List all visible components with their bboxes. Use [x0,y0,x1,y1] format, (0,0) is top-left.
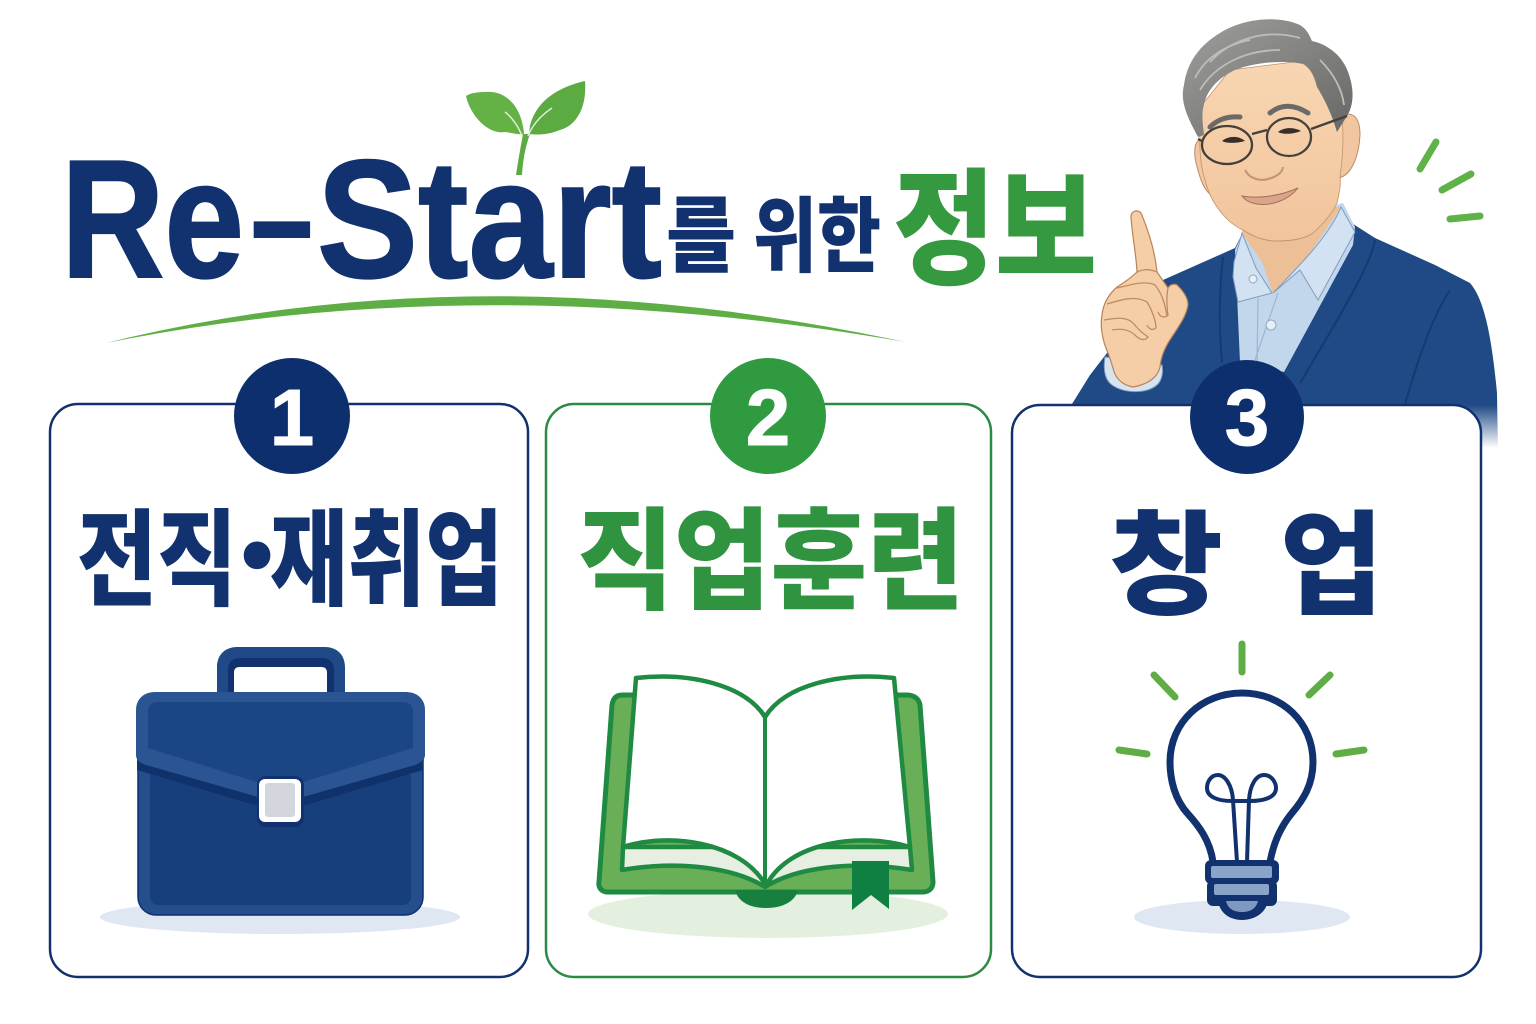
glasses [1198,116,1347,164]
mouth [1242,188,1298,204]
heading 업: 업 [1280,474,1383,638]
neck [1242,205,1341,293]
title: 를: 를 [666,170,736,289]
title: Re: Re [61,125,244,313]
hair [1183,19,1353,137]
panel: 창업 [1012,360,1481,977]
shirt [1235,203,1355,372]
number badge 3 [1190,360,1304,474]
title [61,81,1097,343]
eyes [1222,128,1301,143]
title: hyphen: - [245,139,319,296]
icon: briefcase [100,647,460,934]
title: Start: Start [317,125,662,313]
icon: sprout [466,81,585,175]
eyebrows [1210,106,1308,127]
shirt cuff [1104,357,1163,392]
nose [1245,167,1283,180]
heading [77,458,503,639]
panel: 전직·재취업 [50,358,528,977]
cardigan bands [1220,240,1450,404]
ear left [1195,140,1214,196]
finger creases [1104,270,1168,340]
icon: light bulb [1119,644,1364,934]
panel border [50,404,528,977]
heading part: 재취업: 재취업 [270,476,503,628]
character: presenter [1072,19,1498,450]
ear right [1338,114,1360,178]
collar [1233,207,1355,362]
number badge 1 [234,358,350,474]
face [1200,60,1343,241]
panel border [546,404,991,977]
icon: open book [588,677,948,938]
cardigan [1072,222,1498,450]
title underline swoosh [106,296,905,343]
number badge 3: 3 [1225,373,1269,462]
number badge 2 [710,358,826,474]
panel: 직업훈련 [546,358,991,977]
panel border [1012,405,1481,977]
heading: 직업훈련 [577,471,964,632]
number badge 2: 2 [746,373,790,462]
title: 위한: 위한 [753,170,881,289]
title: 정보: 정보 [893,129,1097,311]
sparkle lines [1420,142,1480,219]
heading part: dot: · [235,458,279,639]
pointing hand [1101,211,1188,387]
heading 창: 창 [1109,474,1223,638]
heading part: 전직: 전직 [77,476,237,628]
number badge 1: 1 [270,373,314,462]
